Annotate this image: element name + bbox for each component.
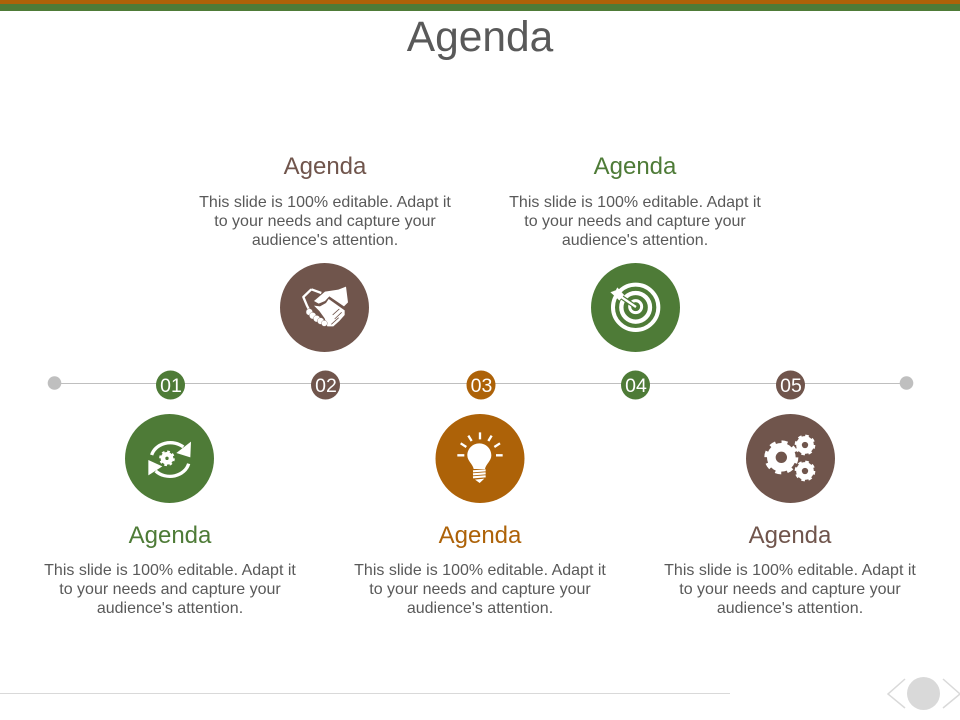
top colour band: [0, 0, 960, 11]
text block: agenda 01: [44, 522, 296, 617]
text block: agenda 03: [354, 522, 606, 617]
text block: agenda 05: Agenda: [749, 522, 831, 549]
marker 02: 02: [315, 375, 337, 397]
text block: agenda 01: audience's attention.: [97, 600, 243, 617]
marker 04: 04: [625, 375, 647, 397]
marker 05: 05: [780, 375, 802, 397]
marker 01: 01: [160, 375, 182, 397]
text block: agenda 04: audience's attention.: [562, 232, 708, 249]
text block: agenda 01: Agenda: [129, 522, 211, 549]
text block: agenda 05: This slide is 100% editable. Adapt it: [664, 562, 916, 579]
marker 02: [311, 370, 340, 400]
text block: agenda 03: to your needs and capture your: [369, 581, 591, 598]
text block: agenda 04: to your needs and capture your: [524, 213, 746, 230]
text block: agenda 05: to your needs and capture your: [679, 581, 901, 598]
navigation arrows: [888, 677, 960, 710]
marker 03: 03: [471, 375, 492, 397]
marker 03: [466, 370, 496, 400]
text block: agenda 02: [199, 153, 451, 249]
text block: agenda 03: This slide is 100% editable. Adapt it: [354, 562, 606, 579]
marker 01: [156, 370, 185, 400]
text block: agenda 01: to your needs and capture your: [59, 581, 281, 598]
text block: agenda 01: This slide is 100% editable. Adapt it: [44, 562, 296, 579]
marker 04: [621, 370, 650, 400]
icon: refresh arrows with gear: [125, 414, 214, 503]
text block: agenda 05: [664, 522, 916, 617]
timeline: [48, 376, 913, 390]
text block: agenda 02: Agenda: [284, 153, 366, 180]
text block: agenda 02: This slide is 100% editable. Adapt it: [199, 194, 451, 211]
text block: agenda 03: audience's attention.: [407, 600, 553, 617]
icon: gears: [746, 414, 835, 503]
text block: agenda 02: audience's attention.: [252, 232, 398, 249]
icon: target with arrow: [591, 263, 680, 352]
text block: agenda 05: audience's attention.: [717, 600, 863, 617]
text block: agenda 04: Agenda: [594, 153, 676, 180]
text block: agenda 03: Agenda: [439, 522, 521, 549]
text block: agenda 02: to your needs and capture your: [214, 213, 436, 230]
icon: handshake: [280, 263, 369, 352]
footer rule: [0, 692, 730, 694]
icon: light bulb: [436, 414, 524, 503]
text block: agenda 04: [509, 153, 761, 249]
title: Agenda: [407, 14, 553, 61]
marker 05: [776, 370, 805, 400]
text block: agenda 04: This slide is 100% editable. Adapt it: [509, 194, 761, 211]
